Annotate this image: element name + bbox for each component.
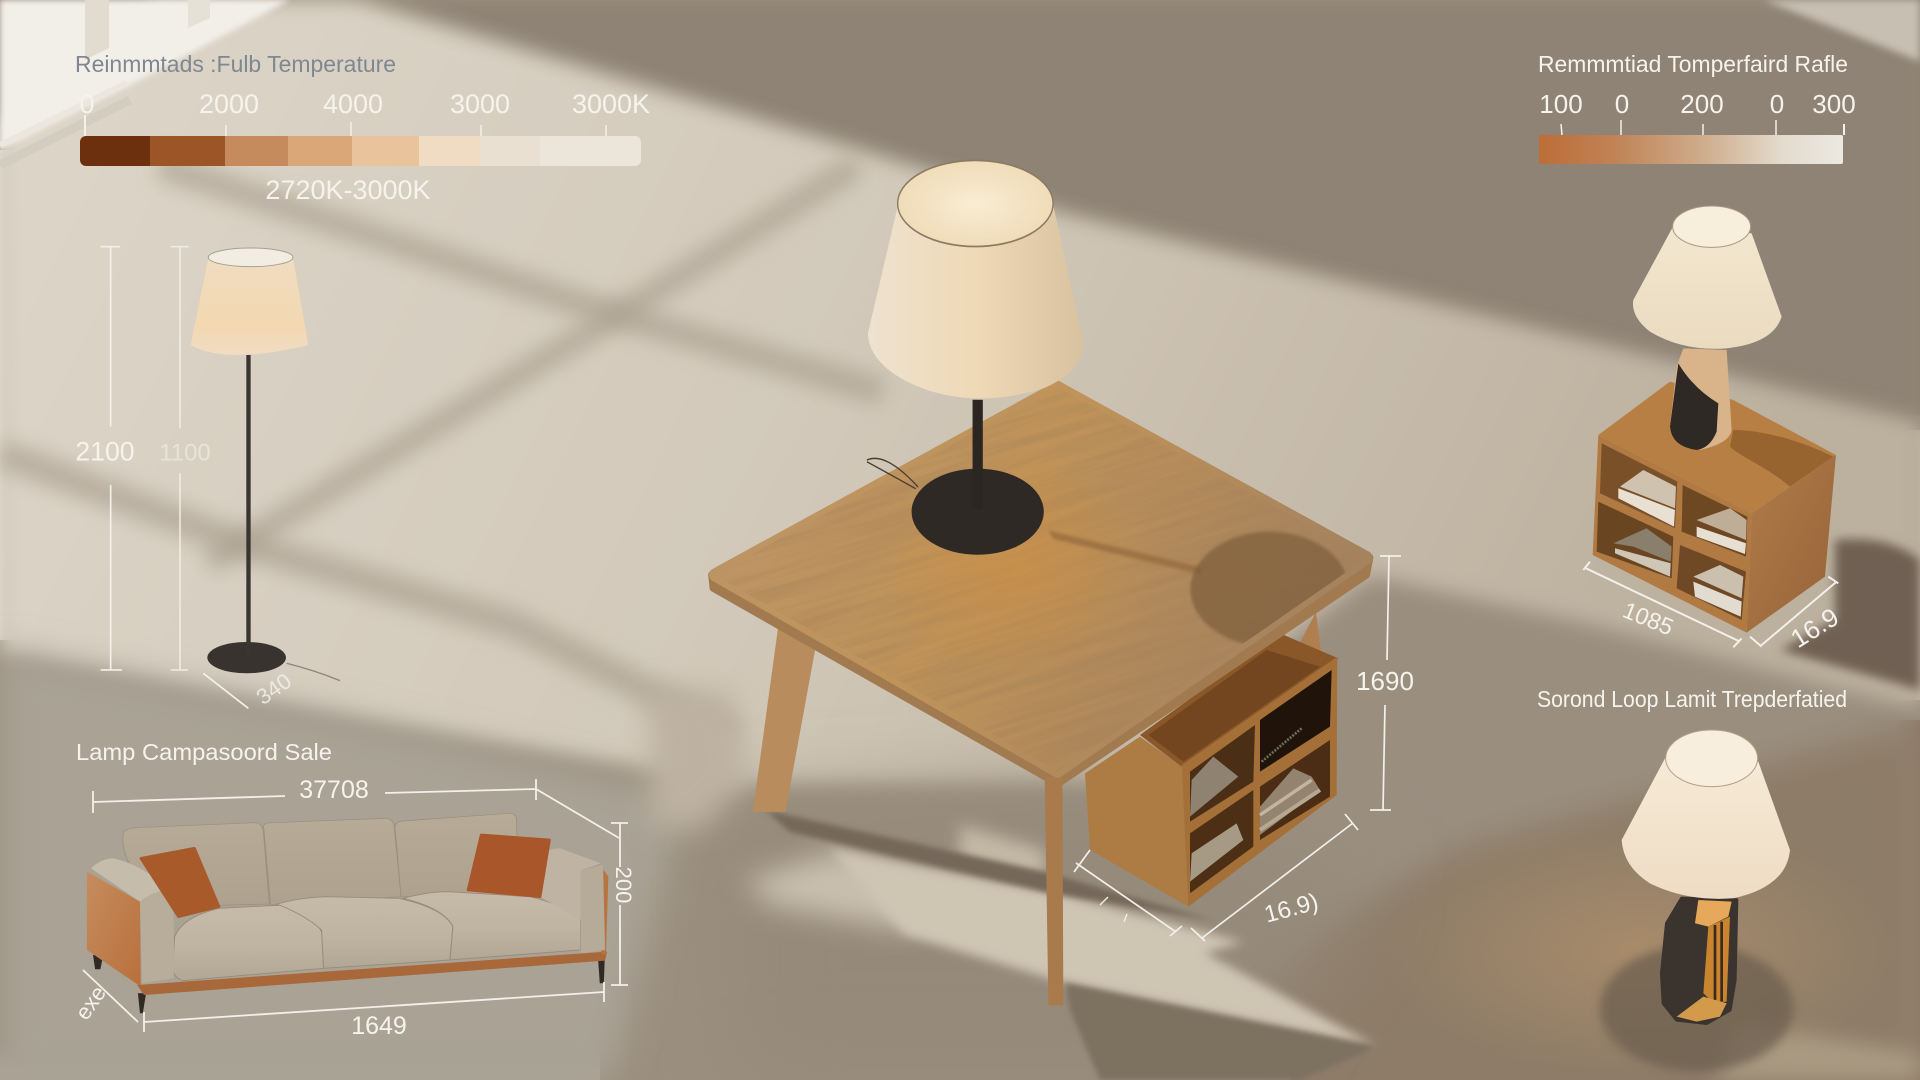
warm glow near lower lamp <box>1380 820 1900 1080</box>
scale labels: 100 <box>1539 89 1583 119</box>
ceramic lamp base <box>1670 348 1732 450</box>
nightstand lamp with dimensions <box>1583 206 1844 654</box>
height dimensions <box>101 247 248 708</box>
sofa height label: 200 <box>611 867 636 903</box>
sofa length label: 1649 <box>351 1012 407 1040</box>
table rim <box>711 558 1371 784</box>
leg shadow band <box>765 810 1212 920</box>
lamp pole <box>246 355 251 653</box>
right legend: recommended temperature range <box>1538 51 1856 164</box>
left legend: recommended bulb temperature <box>75 51 650 205</box>
caption: Sorond Loop Lamit Trepderfatied <box>1537 686 1847 712</box>
scale labels: 4000 <box>323 89 383 119</box>
wood grain, warm glow and cast shadow <box>752 407 1346 700</box>
bottom right lamp panel <box>1537 686 1847 1072</box>
main lamp base <box>912 469 1044 555</box>
main lamp shade top <box>898 160 1053 247</box>
main lamp stem <box>973 400 983 509</box>
nightstand width label: 1085 <box>1619 597 1677 640</box>
sofa scale panel <box>70 739 636 1040</box>
lamp shade <box>1622 758 1790 899</box>
lamp cord <box>867 458 918 489</box>
secondary height label: 1100 <box>159 440 211 467</box>
table height label: 1690 <box>1356 666 1414 696</box>
scale labels: 3000K <box>572 89 650 119</box>
lamp shade <box>1633 226 1782 349</box>
lamp cord <box>287 663 340 681</box>
sofa width label: 37708 <box>299 776 369 804</box>
sofa depth label: exe <box>70 981 111 1024</box>
small light patch behind the leg <box>960 825 1045 880</box>
table dimensions <box>1074 556 1401 941</box>
scale labels: 0 <box>1770 89 1784 119</box>
upper patch by the table leg <box>650 690 750 830</box>
sofa illustration <box>87 813 608 1013</box>
legend title: Reinmmtads :Fulb Temperature <box>75 51 396 77</box>
lamp base <box>1662 898 1737 1023</box>
scale labels <box>1539 89 1856 119</box>
shade opening <box>208 248 293 267</box>
central table <box>708 160 1374 1006</box>
pool of shadow <box>1600 945 1793 1072</box>
cube shelf under table <box>1085 633 1338 907</box>
nightstand box <box>1593 382 1836 633</box>
temperature colour bar <box>80 136 641 166</box>
front leg <box>1045 777 1063 1005</box>
recommended range label: 2720K-3000K <box>265 175 431 205</box>
sofa dimensions <box>83 779 628 1032</box>
soft left end of the light wedge <box>745 850 960 930</box>
main lamp shade <box>868 205 1083 399</box>
scale labels: 0 <box>1615 89 1629 119</box>
left leg <box>753 625 816 812</box>
lower leg shadow <box>1065 983 1377 1080</box>
scale labels <box>79 89 650 119</box>
scale labels: 2000 <box>199 89 259 119</box>
gradient bar <box>1539 135 1843 164</box>
floor lamp with dimensions <box>75 247 340 710</box>
legend title: Remmmtiad Tomperfaird Rafle <box>1538 51 1848 77</box>
dark lamp base band <box>1670 363 1718 450</box>
scale labels: 200 <box>1680 89 1724 119</box>
height label: 2100 <box>75 437 135 467</box>
scale labels: 3000 <box>450 89 510 119</box>
orange cushions <box>141 848 219 917</box>
nightstand depth label: 16.9 <box>1785 602 1844 654</box>
window <box>0 0 290 150</box>
base width label: 340 <box>252 668 296 710</box>
lamp illustration <box>1600 730 1793 1072</box>
light wedge under the table <box>830 850 1377 1047</box>
back table leg <box>1296 612 1322 680</box>
table top <box>714 387 1367 772</box>
scale labels: 0 <box>79 89 95 119</box>
lamp shade top <box>1673 206 1751 247</box>
lamp shade <box>191 258 308 355</box>
sofa title: Lamp Campasoord Sale <box>76 739 332 765</box>
scale labels: 300 <box>1812 89 1856 119</box>
nightstand cast shadow <box>1780 539 1920 690</box>
table depth label: 16.9) <box>1261 888 1321 929</box>
nightstand dimensions <box>1583 562 1838 647</box>
lamp shade top <box>1666 730 1758 787</box>
lamp base <box>207 642 286 673</box>
